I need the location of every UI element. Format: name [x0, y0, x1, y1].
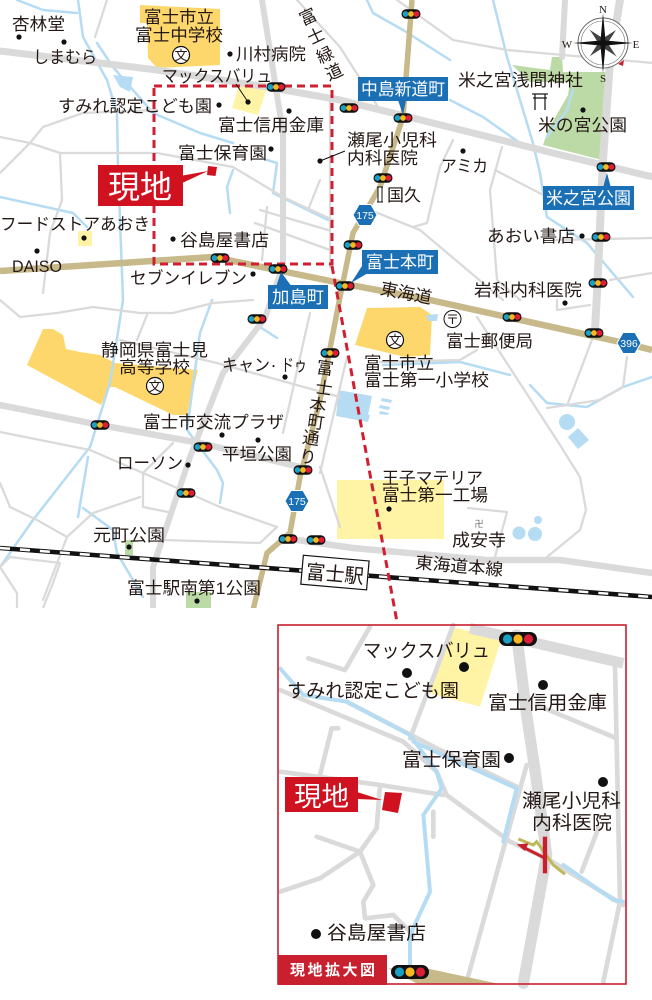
map labels: 卍 [474, 519, 484, 529]
map labels: 富士第一工場 [382, 486, 488, 505]
callout: 加島町: 加島町 [272, 288, 324, 307]
road label: 富士本町通り: 士 [314, 378, 334, 399]
map labels: 杏林堂 [12, 15, 65, 34]
callout: 中島新道町 [358, 77, 448, 115]
map labels: 富士市立 [364, 354, 434, 373]
map labels: 富士駅南第1公園 [127, 579, 261, 598]
map labels: 米の宮公園 [538, 116, 627, 135]
inset callout: 現地 [285, 777, 402, 813]
map labels: DAISO [12, 257, 62, 276]
map labels: キャン [222, 356, 270, 375]
inset labels: すみれ認定こども園 [287, 680, 459, 702]
callout: 富士本町 [351, 250, 438, 283]
map labels: 米之宮浅間神社 [458, 71, 583, 90]
callout: 米之宮公園 [543, 173, 634, 210]
map labels: 成安寺 [452, 531, 506, 550]
map labels: アミカ [441, 157, 488, 176]
road label: 富士本町通り: 町 [306, 412, 326, 433]
inset crossing marker [517, 837, 565, 874]
inset labels: 瀬尾小児科 [522, 790, 621, 812]
map labels: 岩科内科医院 [474, 281, 582, 300]
map labels: あおい書店 [487, 227, 575, 246]
road label: 富士本町通り: 本 [308, 395, 328, 416]
map labels: すみれ認定こども園 [58, 97, 212, 116]
map labels [0, 8, 627, 598]
callout: 富士本町: 富士本町 [366, 253, 434, 272]
map labels: 国久 [387, 186, 421, 205]
road label: 富士緑道 [296, 5, 346, 85]
red dashed range rectangle [154, 86, 397, 622]
inset signals [391, 632, 537, 979]
inset labels: 内科医院 [532, 812, 612, 834]
road label: 富士本町通り [298, 358, 335, 468]
inset labels: 富士保育園 [402, 749, 501, 771]
map labels: 川村病院 [236, 45, 306, 64]
main map base [0, 0, 652, 610]
inset labels [287, 640, 621, 944]
railway [0, 548, 652, 597]
map labels: ・ [268, 362, 278, 373]
road label: 富士本町通り: 富 [315, 358, 335, 379]
map labels: 富士中学校 [135, 26, 223, 45]
panel: inset enlarged map [278, 625, 626, 985]
route badges: 396 [620, 338, 638, 350]
icon: compass: N [599, 4, 607, 16]
callout: 現地: 現地 [108, 169, 172, 205]
minor roads [0, 0, 652, 608]
map labels: 元町公園 [93, 526, 165, 545]
map labels: 富士第一小学校 [364, 371, 489, 390]
map labels: 瀬尾小児科 [347, 131, 437, 150]
map labels: ドゥ [281, 356, 307, 375]
map labels: しまむら [33, 48, 97, 67]
station sign: 富士駅: 富士駅 [305, 561, 365, 589]
school and post office icons: 文 [174, 48, 188, 63]
callout: 加島町 [268, 272, 328, 309]
map labels: 内科医院 [347, 149, 418, 168]
building areas [27, 5, 607, 608]
location dots [16, 34, 586, 604]
inset labels: マックスバリュ [363, 640, 490, 662]
road label: 富士本町通り: り [298, 447, 318, 468]
water [0, 0, 652, 597]
map labels: 富士市交流プラザ [143, 413, 284, 432]
callout: 米之宮公園: 米之宮公園 [546, 189, 631, 208]
school and post office icons: 文 [388, 333, 402, 348]
map labels: 王子マテリア [382, 469, 483, 488]
map labels: ローソン [117, 454, 183, 473]
school and post office icons: 文 [148, 379, 162, 394]
map labels: 東海道本線 [414, 553, 504, 580]
inset caption: 現地拡大図 [290, 961, 375, 979]
map labels: 富士保育園 [178, 144, 267, 163]
road label: 富士緑道: 士 [304, 24, 328, 49]
inset caption [278, 955, 387, 985]
route badges: 175 [288, 496, 306, 508]
icon: shrine gate [532, 94, 548, 110]
map labels: 静岡県富士見 [101, 341, 208, 360]
map labels: 富士信用金庫 [218, 116, 324, 135]
route badges [285, 204, 641, 512]
inset roads and water [280, 625, 623, 983]
callout: 現地 [98, 165, 217, 206]
map labels: 高等学校 [119, 358, 190, 377]
icon: compass: W [562, 39, 573, 51]
road label: 富士本町通り: 通 [301, 428, 321, 449]
map labels: マックスバリュ [162, 67, 272, 86]
tan highways [0, 0, 652, 610]
inset callout: 現地: 現地 [294, 782, 349, 812]
icon: compass: S [600, 73, 606, 85]
road label: 富士緑道: 富 [296, 5, 320, 30]
callout: 中島新道町: 中島新道町 [361, 80, 445, 99]
map labels: セブンイレブン [130, 268, 247, 288]
map labels: 東海道 [379, 279, 433, 308]
school and post office icons: 〒 [446, 312, 459, 327]
school and post office icons [146, 46, 461, 394]
icon: compass: E [633, 39, 640, 51]
map labels: 谷島屋書店 [180, 231, 269, 250]
icon: kokukyu marker [377, 187, 383, 202]
inset labels: 富士信用金庫 [488, 692, 607, 714]
icon: compass [562, 4, 640, 85]
map labels: フードストアあおき [0, 215, 150, 234]
map labels: 富士市立 [144, 8, 214, 27]
inset labels: 谷島屋書店 [327, 922, 426, 944]
map labels: 平垣公園 [222, 445, 292, 464]
traffic signals [90, 9, 616, 545]
route badges: 175 [356, 210, 374, 222]
road label: 富士緑道: 道 [322, 60, 346, 85]
inset dots [311, 662, 608, 939]
road label: 富士緑道: 緑 [313, 43, 337, 68]
main grey roads [0, 0, 652, 608]
inset frame [278, 625, 626, 984]
map labels: 富士郵便局 [446, 332, 533, 351]
